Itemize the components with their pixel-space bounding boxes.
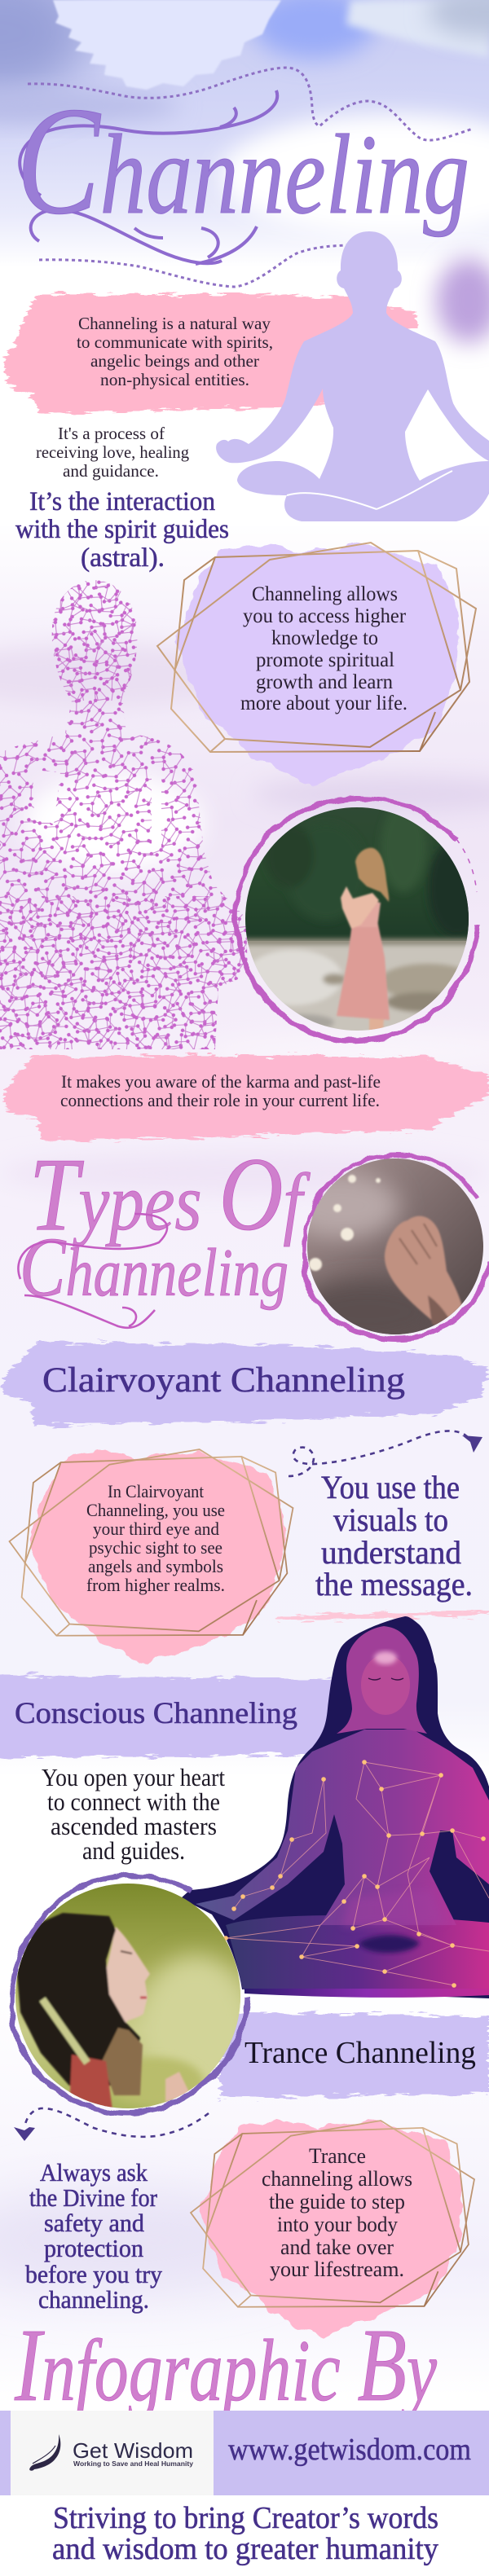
constellation stars [226, 1762, 483, 1985]
illustration: constellation woman [181, 1616, 489, 1998]
heading: types of channeling: Types Of [29, 1136, 311, 1252]
panel: conscious lilac brush [0, 1675, 350, 1758]
gold frame [191, 2121, 474, 2307]
heading: you use the visuals: You use the [321, 1469, 460, 1506]
gold frame [157, 543, 476, 752]
text: trance detail [262, 2144, 412, 2281]
heading: types of channeling [18, 1136, 311, 1328]
text: open your heart: and guides. [82, 1836, 185, 1865]
decorative purple smudge [436, 258, 489, 343]
logo: get wisdom [29, 2434, 194, 2471]
text: karma: connections and their role in your current life. [60, 1090, 380, 1110]
text: always ask the divine: Always ask [40, 2158, 148, 2187]
logo panel [11, 2411, 214, 2495]
text: karma [60, 1071, 381, 1110]
text: higher knowledge: you to access higher [243, 605, 407, 627]
legs [226, 1915, 489, 1989]
text: tagline [52, 2501, 438, 2566]
text: clairvoyant detail: angels and symbols [88, 1556, 223, 1576]
text: always ask the divine: before you try [25, 2260, 162, 2288]
arrow: dotted to the right [289, 1431, 482, 1476]
heading: you use the visuals: understand [321, 1534, 461, 1571]
panel: higher knowledge lilac blob [175, 544, 460, 784]
thin pink stroke [275, 1611, 489, 1621]
heading: interaction with spirit guides: with the spirit guides [15, 515, 229, 544]
heading: interaction with spirit guides: It’s the interaction [29, 487, 215, 517]
text: trance detail: channeling allows [262, 2167, 412, 2191]
text: always ask the divine: safety and [44, 2209, 144, 2237]
text: clairvoyant detail: In Clairvoyant [108, 1481, 204, 1501]
text: higher knowledge: knowledge to [271, 627, 378, 649]
panel: trance pink blob [200, 2121, 463, 2336]
text: clairvoyant detail: your third eye and [93, 1519, 219, 1539]
photo: woman praying by river [236, 798, 485, 1041]
text: always ask the divine [25, 2158, 162, 2314]
text: open your heart: to connect with the [47, 1787, 220, 1816]
text: clairvoyant detail: Channeling, you use [86, 1500, 225, 1520]
text: intro definition [77, 314, 273, 389]
panel: karma pink brush [2, 1056, 489, 1141]
text: trance detail: Trance [309, 2144, 366, 2168]
panel: clairvoyant pink blob [29, 1451, 285, 1664]
text: always ask the divine: the Divine for [29, 2183, 158, 2212]
text: clairvoyant detail [86, 1481, 225, 1595]
text: always ask the divine: protection [44, 2234, 143, 2262]
text: open your heart: ascended masters [51, 1812, 217, 1840]
panel: trance lilac brush [220, 2012, 489, 2098]
text: tagline: and wisdom to greater humanity [52, 2532, 438, 2566]
lower dotted wave [39, 245, 346, 287]
constellation lines [226, 1762, 489, 1985]
text: higher knowledge: promote spiritual [256, 649, 394, 671]
text: clairvoyant detail: psychic sight to see [89, 1537, 222, 1558]
arrow: dotted to the left [14, 2108, 209, 2141]
ground line [244, 1989, 489, 1998]
heading: interaction with spirit guides [15, 487, 229, 573]
photo: woman in wheat field [11, 1875, 253, 2113]
text: higher knowledge: Channeling allows [252, 583, 398, 605]
heading: you use the visuals: the message. [315, 1566, 473, 1602]
heading: interaction with spirit guides: (astral). [81, 543, 165, 573]
illustration: dotted network figure [0, 570, 253, 1059]
logo: get wisdom: Get Wisdom [73, 2438, 193, 2463]
text: higher knowledge: growth and learn [256, 671, 393, 693]
face [361, 1655, 410, 1715]
panel: intro pink brush [5, 294, 418, 414]
heading: clairvoyant channeling: Clairvoyant Channeling [42, 1361, 405, 1400]
text: process of receiving: It's a process of [58, 424, 165, 443]
heading: conscious channeling: Conscious Channeling [15, 1697, 297, 1730]
text: always ask the divine: channeling. [38, 2285, 149, 2314]
icon: meditating silhouette [216, 231, 489, 521]
top dotted wave [28, 68, 473, 140]
heading: infographic by: Infographic By [14, 2307, 437, 2423]
text: trance detail: into your body [277, 2213, 398, 2236]
text: intro definition: angelic beings and other [90, 351, 259, 371]
footer band [0, 2411, 489, 2495]
hair [337, 1626, 427, 1734]
text: karma: It makes you aware of the karma and past-life [61, 1071, 381, 1092]
text: higher knowledge: more about your life. [240, 692, 408, 714]
logo: get wisdom: Working to Save and Heal Humanity [73, 2460, 194, 2468]
text: open your heart [42, 1763, 225, 1865]
text: intro definition: to communicate with spirits, [77, 332, 273, 352]
text: open your heart: You open your heart [42, 1763, 225, 1791]
text: clairvoyant detail: from higher realms. [86, 1575, 225, 1595]
text: process of receiving: receiving love, healing [36, 442, 189, 462]
heading: types of channeling: Channeling [20, 1220, 289, 1314]
heading: you use the visuals [315, 1469, 473, 1602]
text: tagline: Striving to bring Creator’s words [53, 2501, 438, 2535]
text: process of receiving: and guidance. [63, 461, 159, 481]
photo: praying hands [285, 1155, 489, 1344]
text: intro definition: Channeling is a natural way [78, 314, 271, 333]
panel: clairvoyant lilac brush [2, 1343, 489, 1426]
heading: trance channeling: Trance Channeling [244, 2036, 476, 2070]
text: higher knowledge [240, 583, 408, 714]
gold frame [9, 1449, 293, 1636]
heading: you use the visuals: visuals to [333, 1501, 448, 1538]
torso and arms [196, 1730, 489, 1925]
text: trance detail: and take over [280, 2235, 394, 2259]
text: trance detail: the guide to step [269, 2190, 405, 2213]
text: trance detail: your lifestream. [270, 2257, 404, 2281]
text: intro definition: non-physical entities. [100, 370, 249, 389]
text: process of receiving [36, 424, 189, 481]
